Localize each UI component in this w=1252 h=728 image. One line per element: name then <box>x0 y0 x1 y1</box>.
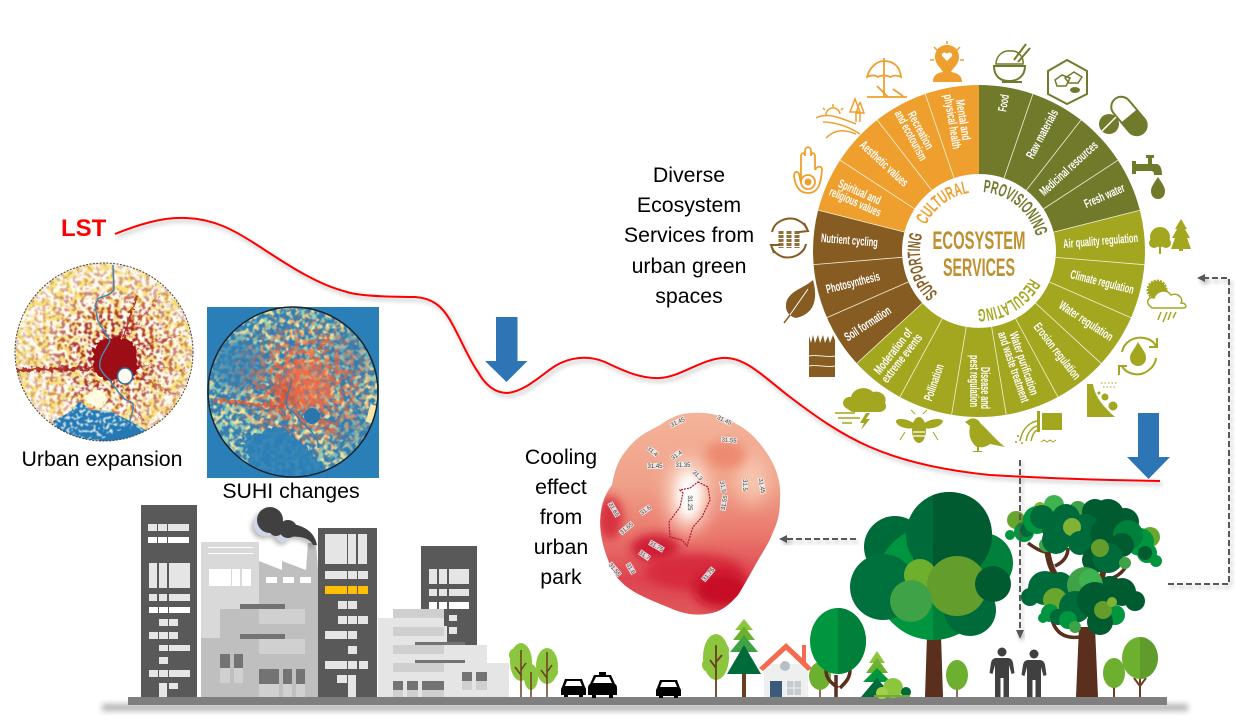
segment labels: Moderation of <box>871 325 916 377</box>
house <box>759 643 812 697</box>
ground shadow <box>102 704 1188 711</box>
text: cooling effect from urban park: Cooling <box>525 445 597 469</box>
center title: SERVICES <box>943 254 1015 282</box>
category: provisioning: PROVISIONING <box>984 180 1048 236</box>
temperature labels: 31.45 <box>670 417 687 429</box>
icon: sun and rain cloud <box>1148 281 1186 322</box>
pine tree <box>727 619 761 697</box>
text: cooling effect from urban park: park <box>540 565 582 589</box>
small trees left <box>509 643 558 697</box>
icon: hand <box>794 147 822 193</box>
icon: person with heart <box>930 41 964 82</box>
icon: storm <box>835 388 886 430</box>
temperature labels: 31.6 <box>639 505 653 517</box>
segment labels: Raw materials <box>1023 107 1061 161</box>
dashed arrow: tree to cooling map <box>779 535 856 543</box>
icon: trees <box>1149 219 1191 254</box>
segment labels: Recreation <box>905 109 936 152</box>
temperature labels: 31.5 <box>718 481 726 494</box>
segment labels: Aesthetic values <box>857 138 911 189</box>
segment labels: pest regulation <box>967 355 981 407</box>
segment labels <box>820 93 1139 409</box>
segment labels: Water regulation <box>1056 298 1116 344</box>
temperature labels: 31.75 <box>702 567 717 583</box>
small tree by people <box>946 660 968 697</box>
text: diverse ecosystem services: Diverse <box>653 163 725 187</box>
blue arrow: mid curve <box>485 317 528 382</box>
text: cooling effect from urban park <box>525 445 597 589</box>
category: cultural: CULTURAL <box>916 182 969 224</box>
segment labels: extreme events <box>879 331 925 385</box>
small trees right <box>1103 637 1158 697</box>
category: supporting: SUPPORTING <box>908 233 937 300</box>
segment labels: Medicinal resources <box>1037 138 1101 199</box>
temperature labels: 31.65 <box>619 521 635 536</box>
blue arrow: right <box>1127 413 1170 479</box>
temperature labels: 31.55 <box>721 494 729 511</box>
building: low block <box>378 609 509 699</box>
icon: soil layers <box>809 335 835 377</box>
icon: landscape <box>816 99 864 138</box>
icon: tap with water drop <box>1132 155 1165 199</box>
icon: water cycle <box>1119 338 1157 375</box>
LST label: LST <box>61 215 107 242</box>
icon: bee <box>896 410 943 443</box>
temperature labels: 31.3 <box>691 470 704 483</box>
temperature labels: 31.65 <box>607 502 620 519</box>
small pine and bush <box>861 651 911 699</box>
person <box>1022 650 1046 697</box>
temperature labels <box>606 414 766 583</box>
icon: food bowl <box>994 44 1030 82</box>
text: diverse ecosystem services: Services from <box>624 223 754 247</box>
segment labels: Pollination <box>921 362 947 403</box>
icon: water outlet <box>1015 411 1062 444</box>
oval tree <box>810 608 866 697</box>
ground bar <box>128 697 1167 705</box>
SUHI changes map <box>207 307 379 482</box>
segment labels: Mental and <box>953 98 973 141</box>
dashed arrow: trees to ecosystem services <box>1168 274 1229 584</box>
segment labels: physical health <box>941 93 964 150</box>
building: back tower <box>421 546 477 656</box>
caption: SUHI changes: SUHI changes <box>222 479 360 503</box>
temperature labels: 31.4 <box>670 450 684 462</box>
caption: Urban expansion: Urban expansion <box>21 447 183 471</box>
icon: factory smoke <box>254 507 317 545</box>
icon: bird <box>965 418 1005 452</box>
icon: nutrient cycling <box>771 219 808 257</box>
segment labels: religious values <box>827 185 883 220</box>
center title <box>932 227 1026 282</box>
temperature labels: 31.45 <box>716 415 733 427</box>
large layered tree <box>1005 495 1162 697</box>
segment labels: Water purification <box>1007 330 1041 397</box>
large park tree <box>850 492 1013 697</box>
segment labels: and waste treatment <box>995 330 1032 405</box>
person <box>990 648 1014 697</box>
building: factory <box>201 542 318 698</box>
small tree <box>809 662 831 697</box>
text: cooling effect from urban park: urban <box>534 535 588 559</box>
car <box>656 680 681 698</box>
icon: erosion <box>1087 383 1118 417</box>
tree beside pine <box>702 634 729 697</box>
heat map: cooling effect from urban park <box>595 410 785 620</box>
segment labels: Fresh water <box>1082 181 1127 211</box>
text: cooling effect from urban park: effect <box>535 475 587 499</box>
temperature labels: 31.7 <box>637 550 651 562</box>
temperature labels: 31.35 <box>675 463 691 469</box>
text: cooling effect from urban park: from <box>540 505 582 529</box>
temperature labels: 31.25 <box>686 495 692 511</box>
segment labels: Spiritual and <box>836 177 883 208</box>
building: left tower <box>141 505 197 702</box>
center title: ECOSYSTEM <box>932 227 1026 255</box>
LST temperature curve <box>115 218 1160 481</box>
temperature labels: 31.45 <box>647 464 663 470</box>
sector: provisioning <box>979 85 1140 232</box>
temperature labels: 31.55 <box>607 562 622 578</box>
text: diverse ecosystem services: urban green <box>632 254 746 278</box>
icon: pills <box>1099 93 1151 139</box>
icon: raw materials hexagon <box>1048 60 1087 104</box>
segment labels: Photosynthesis <box>825 269 881 296</box>
temperature labels: 31.4 <box>646 446 659 458</box>
temperature labels: 31.55 <box>721 437 737 445</box>
sector: cultural <box>818 85 979 232</box>
icon: leaf <box>784 280 815 323</box>
park boundary <box>669 482 710 546</box>
urban expansion map <box>15 263 193 450</box>
temperature labels: 31.6 <box>624 562 636 576</box>
ecosystem services wheel <box>813 85 1145 417</box>
segment labels: Disease and <box>978 367 992 409</box>
category: regulating: REGULATING <box>978 278 1041 322</box>
sector: regulating <box>857 210 1145 417</box>
segment labels: Food <box>995 94 1012 113</box>
icon: umbrella <box>867 58 907 97</box>
taxi <box>588 672 617 698</box>
segment labels: and ecotourism <box>892 108 930 163</box>
building: center tower <box>318 528 377 698</box>
dashed arrow: services to people <box>1016 460 1024 639</box>
temperature labels: 31.75 <box>648 541 665 554</box>
sector: supporting <box>813 210 922 363</box>
text: diverse ecosystem services: Ecosystem <box>637 193 741 217</box>
segment labels: Soil formation <box>842 303 894 344</box>
segment labels: Climate regulation <box>1069 267 1135 297</box>
temperature labels: 31.45 <box>757 478 765 495</box>
temperature labels: 31.5 <box>741 479 747 491</box>
segment labels: Air quality regulation <box>1063 231 1139 251</box>
text: diverse ecosystem services: spaces <box>655 284 723 308</box>
segment labels: Nutrient cycling <box>820 231 878 250</box>
car <box>561 679 586 697</box>
segment labels: Erosion regulation <box>1031 320 1083 382</box>
text: diverse ecosystem services <box>624 163 754 308</box>
